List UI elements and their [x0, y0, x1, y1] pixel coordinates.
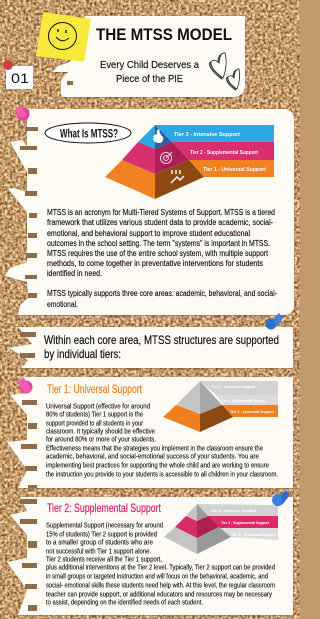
page number tag: 01 [11, 71, 29, 86]
pyramid: tier 2 highlighted [164, 504, 278, 554]
text: tier 1 body: 80% of students) Tier 1 support is the [46, 412, 143, 418]
text: tier 2 body: 15% of students) Tier 2 support is provided [46, 532, 157, 538]
sticky note with smiley [36, 12, 91, 62]
icon: smiley [48, 22, 76, 50]
pyramid chart: Tier 2 - Supplemental Support [190, 150, 258, 156]
heading: tier 1: Tier 1: Universal Support [47, 382, 142, 396]
text: tier 1 body: for around 80% or more of your students. [46, 436, 156, 444]
text: MTSS definition: outcomes in the school setting. The term "systems" is important in MTSS. [47, 239, 270, 248]
subtitle: Piece of the PIE [116, 73, 183, 85]
pyramid: tier 1 highlighted: Tier 2 - Supplemental Support [221, 399, 266, 403]
title: THE MTSS MODEL [96, 25, 232, 44]
pyramid chart: Tier 3 - Intensive Support [174, 132, 240, 138]
pyramid: tier 1 highlighted [163, 381, 278, 432]
text: tier 2 body: to assist, depending on the identified needs of each student. [46, 600, 203, 606]
icon: blue pin tier 2 [272, 490, 290, 506]
text: tiers intro: by individual tiers: [44, 347, 121, 361]
text: tier 1 body: Effectiveness means that the strategies you implement in the classroom ensure the [46, 446, 263, 452]
text: tier 2 body: Tier 2 students receive all the Tier 1 support, [46, 556, 162, 564]
panel: what is MTSS [5, 109, 294, 315]
text: tier 1 body: academic, behavioral, and social-emotional success of your students. You are [46, 454, 259, 460]
heading: tier 2: Tier 2: Supplemental Support [47, 501, 161, 515]
heading: what is MTSS: What Is MTSS? [60, 128, 118, 140]
panel: tier 2 [7, 497, 293, 615]
text: tiers intro [44, 333, 279, 361]
icon: red pin [3, 60, 13, 70]
torn notebook holes [20, 127, 38, 298]
icon: hearts [209, 53, 240, 90]
text: MTSS definition [47, 208, 277, 309]
pyramid: tier 1 highlighted: Tier 1 - Universal Support [230, 410, 275, 414]
panel: tier 1 [7, 377, 293, 488]
text: tier 1 body: support provided to all students in your [46, 420, 144, 428]
text: tier 1 body: classroom. It typically should be effective [46, 428, 155, 436]
subtitle [100, 59, 199, 85]
pyramid: tier 1 highlighted: Tier 3 - Intensive Support [211, 385, 256, 389]
text: tier 1 body: Universal Support (effective for around [46, 404, 150, 410]
icon: people with chart [171, 170, 184, 183]
text: tier 1 body [46, 404, 278, 478]
icon: pink pin [15, 105, 30, 120]
text: MTSS definition: MTSS requires the use of the entire school system, with multiple support [47, 249, 269, 258]
icon: flame [153, 129, 163, 143]
pyramid: tier 2 highlighted: Tier 3 - Intensive Support [211, 509, 257, 513]
page number tag [6, 66, 33, 89]
pyramid chart [105, 125, 274, 199]
subtitle: Every Child Deserves a [100, 59, 199, 71]
text: MTSS definition: identified in need. [47, 269, 102, 278]
icon: pink pin tier 1 [17, 378, 32, 394]
text: tier 2 body: Supplemental Support (necessary for around [46, 522, 163, 530]
pyramid chart: Tier 1 - Universal Support [203, 167, 266, 173]
heading: what is MTSS [45, 123, 131, 143]
panel: title card [36, 12, 245, 97]
panel: tiers intro [9, 327, 293, 368]
text: tier 2 body: to a smaller group of students who are [46, 540, 153, 546]
text: tier 2 body: not successful with Tier 1 support alone. [46, 548, 151, 556]
text: MTSS definition: emotional. [47, 300, 78, 309]
text: MTSS definition: methods, to come together in preventative interventions for students [47, 259, 263, 268]
text: MTSS definition: framework that utilizes various student data to provide academic, social- [47, 218, 273, 227]
pyramid: tier 2 highlighted: Tier 1 - Universal Support [231, 533, 276, 537]
pyramid: tier 2 highlighted: Tier 2 - Supplemental Support [221, 521, 270, 525]
icon: blue pin [266, 313, 283, 330]
text: MTSS definition: emotional, and behavioral support to improve student educational [47, 229, 250, 238]
icon: target [160, 152, 172, 164]
text: tier 2 body [46, 522, 275, 606]
